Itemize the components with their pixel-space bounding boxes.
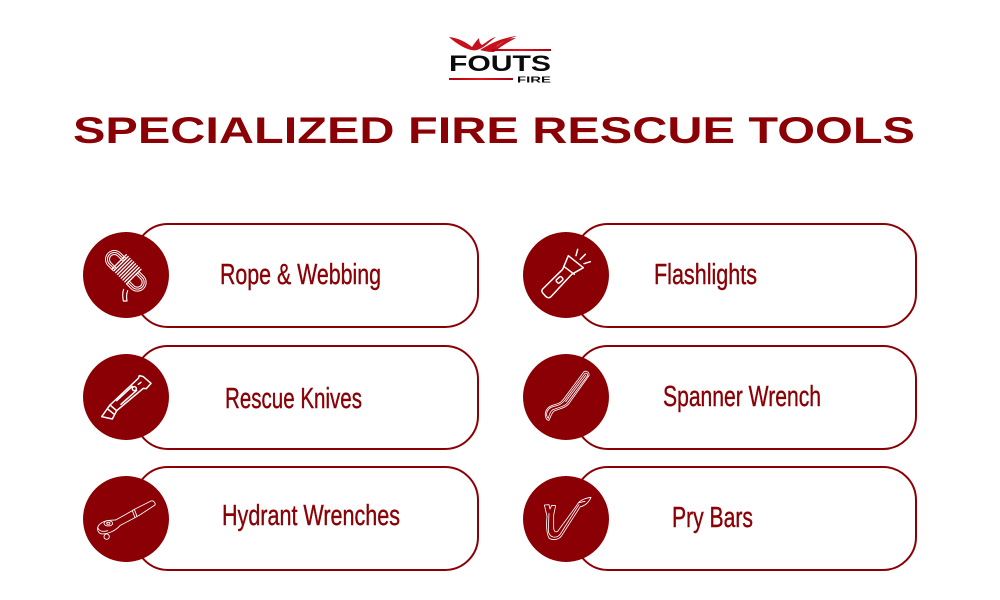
panel: Rope & Webbing	[83, 224, 478, 327]
label: Hydrant Wrenches	[222, 500, 400, 532]
label: Spanner Wrench	[663, 381, 821, 413]
logo lower line	[449, 78, 513, 80]
icon disc	[523, 232, 609, 318]
logo: Fouts Fire	[449, 36, 552, 84]
icon: spanner wrench	[545, 371, 589, 420]
icon: pry bar	[544, 497, 591, 540]
label: Rope & Webbing	[220, 259, 381, 291]
panel: Hydrant Wrenches	[83, 467, 478, 570]
panel: Spanner Wrench	[523, 346, 916, 449]
panel outline	[135, 224, 478, 327]
panel outline	[575, 224, 916, 327]
logo flame wings	[449, 36, 517, 52]
icon disc	[523, 354, 609, 440]
icon: rescue knife	[102, 376, 151, 419]
label: Pry Bars	[672, 502, 753, 534]
panel: Flashlights	[523, 224, 916, 327]
icon: ratchet wrench	[98, 501, 155, 539]
icon disc	[523, 476, 609, 562]
panel outline	[135, 467, 478, 570]
title: SPECIALIZED FIRE RESCUE TOOLS	[73, 110, 915, 151]
icon disc	[83, 232, 169, 318]
panel outline	[575, 346, 916, 449]
panel outline	[135, 346, 478, 449]
label: Flashlights	[654, 259, 757, 291]
label: Rescue Knives	[225, 383, 362, 415]
logo upper line	[492, 49, 551, 51]
logo sub-word: FIRE	[517, 74, 552, 84]
icon disc	[83, 476, 169, 562]
icon: rope coil	[112, 255, 141, 301]
logo wordmark: FOUTS	[449, 51, 551, 76]
panel outline	[575, 467, 916, 570]
icon: flashlight	[542, 249, 590, 298]
panel: Rescue Knives	[83, 346, 478, 449]
panel: Pry Bars	[523, 467, 916, 570]
icon disc	[83, 354, 169, 440]
